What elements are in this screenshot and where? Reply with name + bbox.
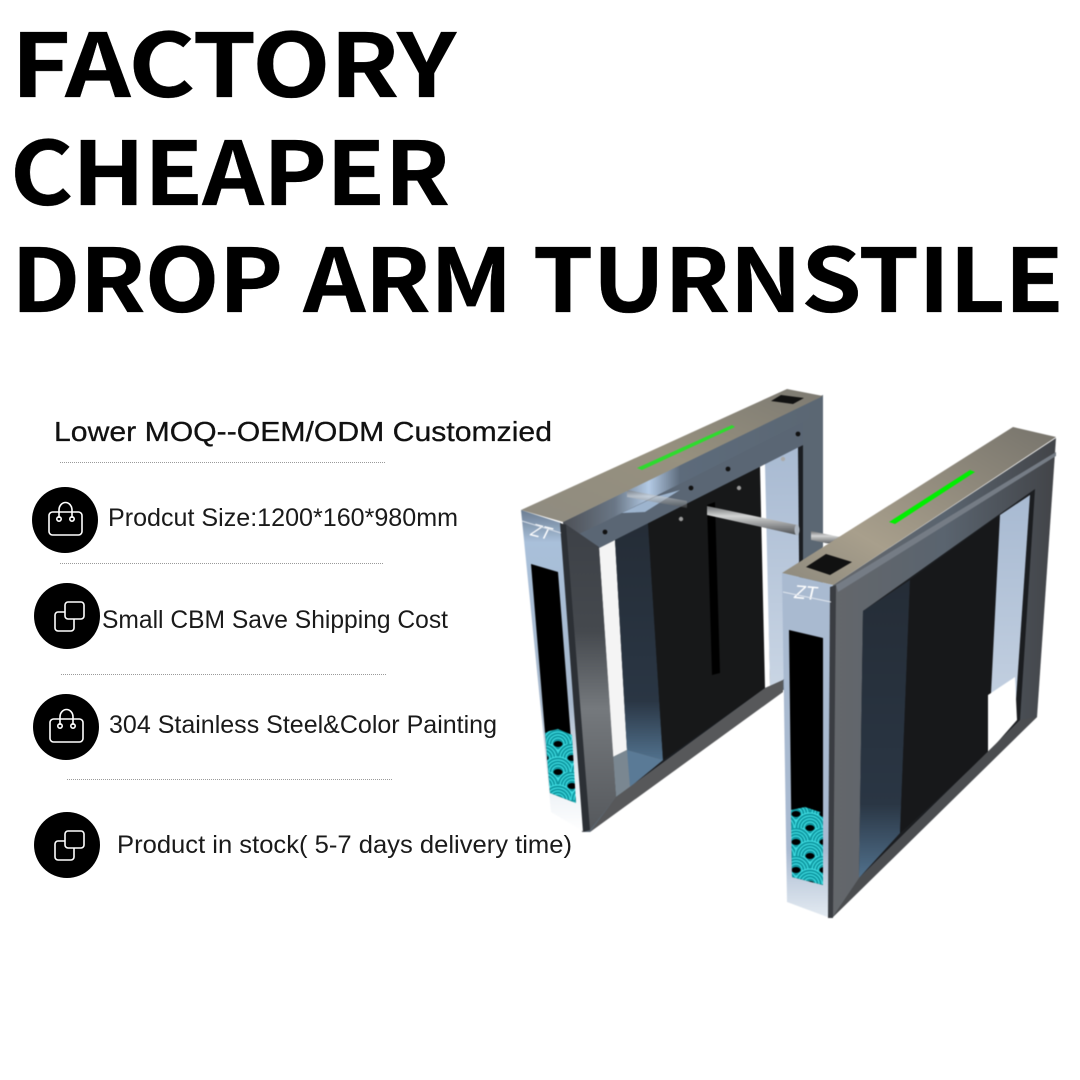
post display xyxy=(789,630,823,885)
drop arm bar xyxy=(627,490,840,545)
front unit top face xyxy=(782,427,1056,585)
rear unit lower rail xyxy=(590,680,783,832)
front unit post front xyxy=(782,573,833,918)
rear unit top face xyxy=(521,389,823,522)
icon: copy squares 1 xyxy=(34,583,100,649)
rear unit post front xyxy=(521,510,584,832)
icon: copy squares 2 xyxy=(34,812,100,878)
feature text: product size: Prodcut Size:1200*160*980mm xyxy=(108,504,458,532)
turnstile: front unit xyxy=(782,427,1056,918)
front unit side frame xyxy=(832,438,1056,918)
turnstile: rear unit xyxy=(521,389,840,832)
ZT logo: ZT xyxy=(527,520,555,543)
front unit window xyxy=(859,489,1035,878)
teal wave pattern xyxy=(545,729,576,803)
title: DROP ARM TURNSTILE xyxy=(11,211,1063,338)
green light bar xyxy=(889,470,975,524)
green light bar xyxy=(637,425,735,470)
ZT logo: ZT xyxy=(792,582,820,605)
feature text: in stock: Product in stock( 5-7 days delivery time) xyxy=(117,831,572,859)
rear unit left stile xyxy=(564,523,616,832)
card reader xyxy=(771,395,804,404)
icon: bag 1 xyxy=(32,487,98,553)
card reader xyxy=(806,554,852,575)
rear unit top beam xyxy=(563,395,823,546)
screws xyxy=(603,432,800,534)
post display xyxy=(531,564,576,803)
icon: bag 2 xyxy=(33,694,99,760)
title xyxy=(10,0,1063,338)
feature text: small CBM: Small CBM Save Shipping Cost xyxy=(102,606,448,634)
rear unit frame backing xyxy=(563,395,823,832)
feature text: stainless steel: 304 Stainless Steel&Color Painting xyxy=(109,711,497,739)
subheading: Lower MOQ--OEM/ODM Customzied xyxy=(54,416,552,447)
teal wave pattern xyxy=(791,807,823,885)
front unit lower rail xyxy=(832,717,1037,918)
title: CHEAPER xyxy=(10,104,449,231)
rear unit window xyxy=(599,445,803,797)
